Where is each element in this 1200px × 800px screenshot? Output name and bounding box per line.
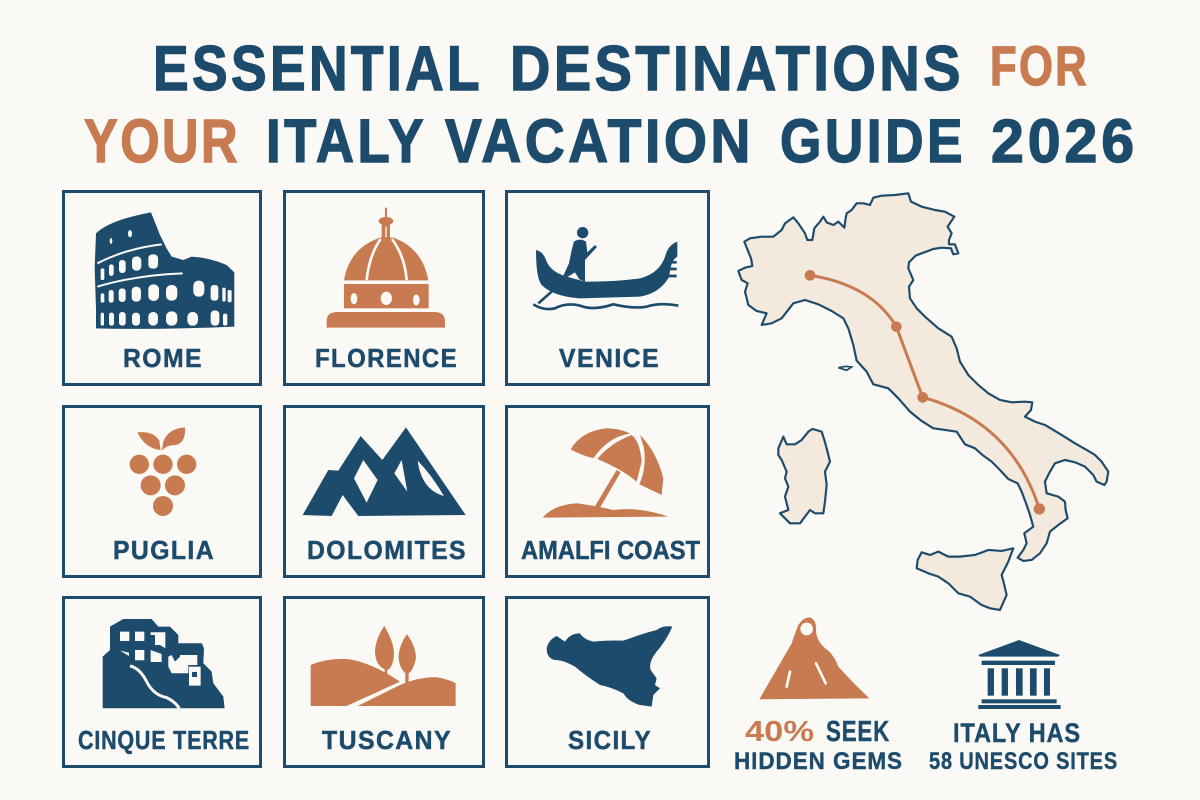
icon: cathedral dome: [327, 208, 445, 328]
label: Dolomites: DOLOMITES: [307, 535, 467, 565]
island: Sardinia: [778, 429, 830, 523]
panel: Venice: [506, 192, 708, 384]
label: Rome: ROME: [123, 343, 203, 373]
map of Italy with route: [738, 193, 1108, 610]
stat: UNESCO sites: [929, 640, 1118, 775]
icon: pin mountain: [759, 617, 869, 699]
title: YOUR: [84, 107, 240, 175]
panel: Tuscany: [284, 598, 484, 766]
panel: Dolomites: [284, 406, 484, 576]
panel: Florence: [284, 192, 484, 384]
panel: Amalfi Coast: [506, 406, 708, 576]
icon: gondola: [533, 227, 678, 309]
title: ESSENTIAL: [153, 34, 483, 104]
title: [84, 34, 1138, 175]
title: FOR: [990, 34, 1089, 97]
label: Sicily: SICILY: [568, 725, 652, 755]
icon: hills and cypresses: [311, 626, 456, 706]
label: Tuscany: TUSCANY: [322, 725, 452, 755]
stat text: 40% seek hidden gems: HIDDEN GEMS: [734, 748, 903, 775]
panel: Cinque Terre: [64, 598, 260, 766]
route line with stops: [805, 270, 1045, 515]
island: Sicily: [917, 548, 1013, 610]
icon: cliffside village: [103, 619, 225, 708]
mainland Italy: [738, 193, 1108, 561]
icon: beach umbrella: [543, 428, 668, 518]
stat text: Italy has 58 UNESCO sites: [929, 718, 1118, 775]
stat text: Italy has 58 UNESCO sites: 58 UNESCO SITES: [929, 748, 1118, 775]
stat: hidden gems: [734, 617, 903, 775]
icon: Sicily silhouette: [547, 626, 672, 707]
label: Florence: FLORENCE: [315, 343, 458, 373]
stat text: 40% seek hidden gems: SEEK: [826, 716, 890, 748]
icon: Colosseum: [95, 212, 234, 329]
stat text: 40% seek hidden gems: [734, 716, 903, 775]
island: Elba: [838, 366, 852, 370]
title: DESTINATIONS: [510, 34, 964, 104]
title: VACATION: [445, 107, 754, 175]
panel: Puglia: [64, 406, 260, 576]
panel: Rome: [64, 192, 260, 384]
panel: Sicily: [506, 598, 708, 766]
title: GUIDE: [780, 107, 966, 175]
icon: mountains: [303, 427, 466, 516]
stat text: Italy has 58 UNESCO sites: ITALY HAS: [953, 718, 1081, 748]
stat text: 40% seek hidden gems: 40%: [745, 716, 814, 748]
title: 2026: [991, 107, 1138, 175]
label: Amalfi Coast: AMALFI COAST: [521, 535, 700, 565]
title: ITALY: [266, 107, 427, 175]
label: Venice: VENICE: [559, 343, 660, 373]
label: Cinque Terre: CINQUE TERRE: [78, 725, 250, 755]
label: Puglia: PUGLIA: [113, 535, 215, 565]
icon: classical temple: [978, 640, 1061, 709]
icon: grapes: [130, 427, 196, 516]
